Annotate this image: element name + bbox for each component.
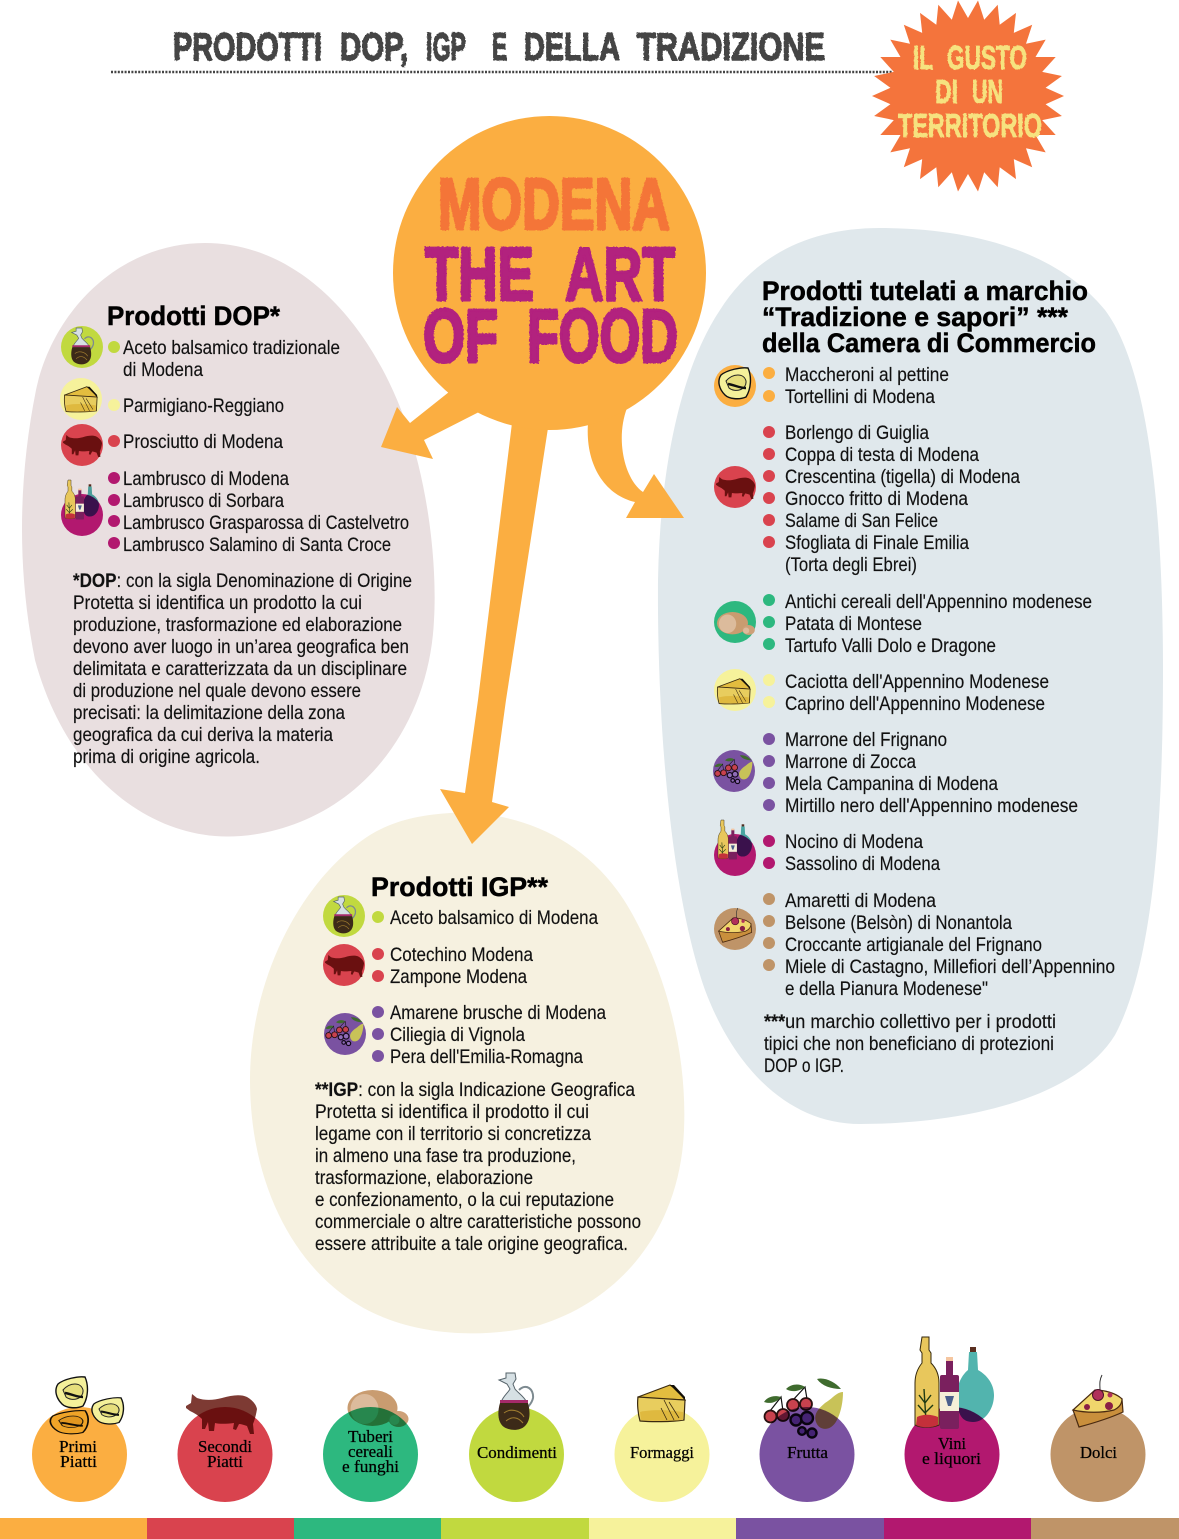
legend: tuberi cereali e funghi: Tuberi	[348, 1427, 393, 1446]
colour bar	[0, 1518, 1179, 1539]
panel: tradition background blob	[658, 228, 1163, 1124]
list: secondi piatti: Salame di San Felice	[785, 510, 938, 532]
list: tuberi cereali funghi	[763, 591, 1092, 657]
legend: primi piatti: Piatti	[60, 1452, 97, 1471]
icon: secondi piatti	[323, 944, 365, 986]
text block: tradition note: ***un marchio collettivo per i prodotti	[764, 1011, 1056, 1033]
title: TRADIZIONE	[637, 26, 825, 69]
title: E	[492, 26, 507, 69]
text block: DOP definition: geografica da cui deriva la materia	[73, 724, 333, 746]
text block: IGP definition: essere attribuite a tale origine geografica.	[315, 1233, 628, 1255]
list: DOP products: Lambrusco di Sorbara	[123, 490, 284, 512]
central circle with heading	[393, 116, 706, 430]
title: DOP,	[340, 26, 408, 69]
list: DOP products	[108, 337, 409, 556]
icon: secondi piatti	[714, 466, 756, 508]
central circle with heading: THE	[425, 232, 534, 316]
icon: vini e liquori	[714, 820, 756, 876]
badge: il gusto di un territorio: DI	[935, 73, 958, 110]
list: frutta	[763, 729, 1078, 817]
title: DELLA	[524, 26, 620, 69]
legend: formaggi: Formaggi	[630, 1443, 694, 1462]
text block: IGP definition: Protetta si identifica il prodotto il cui	[315, 1101, 589, 1123]
list: IGP products	[372, 907, 606, 1068]
text block: DOP definition: precisati: la delimitazione della zona	[73, 702, 345, 724]
list: secondi piatti	[763, 422, 1020, 576]
text block: DOP definition: Protetta si identifica un prodotto la cui	[73, 592, 362, 614]
panel: IGP background blob	[250, 813, 684, 1333]
text block: DOP definition: produzione, trasformazione ed elaborazione	[73, 614, 402, 636]
legend: dolci: Dolci	[1080, 1443, 1117, 1462]
text block: IGP definition: e confezionamento, o la cui reputazione	[315, 1189, 614, 1211]
heading: Prodotti DOP: Prodotti DOP*	[107, 301, 280, 331]
list: IGP products: Amarene brusche di Modena	[390, 1002, 606, 1024]
icon: frutta	[713, 750, 755, 792]
central circle with heading: ART	[565, 232, 675, 316]
list: formaggi: Caciotta dell'Appennino Modenese	[785, 671, 1049, 693]
list: DOP products: Prosciutto di Modena	[123, 431, 283, 453]
icon: vini e liquori	[61, 480, 103, 536]
list: IGP products: Zampone Modena	[390, 966, 527, 988]
text block: IGP definition	[315, 1079, 641, 1255]
list: frutta: Mela Campanina di Modena	[785, 773, 998, 795]
list: IGP products: Aceto balsamico di Modena	[390, 907, 598, 929]
legend: tuberi cereali e funghi: cereali	[348, 1442, 393, 1461]
text block: tradition note	[764, 1011, 1056, 1077]
list: frutta: Marrone del Frignano	[785, 729, 947, 751]
legend: tuberi cereali e funghi	[323, 1390, 418, 1502]
legend: formaggi	[614, 1385, 710, 1502]
arrow: to IGP	[440, 423, 548, 844]
panel: prodotti IGP	[315, 872, 641, 1255]
badge: il gusto di un territorio: TERRITORIO	[898, 107, 1042, 144]
legend: secondi piatti: Secondi	[198, 1437, 252, 1456]
icon: dolci	[714, 908, 756, 950]
list: secondi piatti: (Torta degli Ebrei)	[785, 554, 917, 576]
text block: IGP definition: in almeno una fase tra produzione,	[315, 1145, 576, 1167]
heading: tradition products	[762, 276, 1096, 358]
list: DOP products: Lambrusco Salamino di Santa Croce	[123, 534, 391, 556]
list: tuberi cereali funghi: Antichi cereali dell'Appennino modenese	[785, 591, 1092, 613]
legend: vini e liquori	[904, 1337, 1000, 1502]
list: vini e liquori	[763, 831, 940, 875]
list: secondi piatti: Borlengo di Guiglia	[785, 422, 929, 444]
list: dolci: Croccante artigianale del Frignano	[785, 934, 1042, 956]
central circle with heading: FOOD	[527, 294, 678, 378]
list: frutta: Mirtillo nero dell'Appennino modenese	[785, 795, 1078, 817]
legend: primi piatti	[32, 1377, 127, 1502]
panel: DOP background blob	[22, 243, 435, 836]
icon: secondi piatti	[61, 424, 103, 466]
text block: IGP definition: legame con il territorio si concretizza	[315, 1123, 591, 1145]
badge: il gusto di un territorio: UN	[972, 73, 1003, 110]
legend: vini e liquori: Vini	[938, 1434, 966, 1453]
list: formaggi	[763, 671, 1049, 715]
list: tuberi cereali funghi: Patata di Montese	[785, 613, 922, 635]
badge: il gusto di un territorio: GUSTO	[947, 39, 1027, 76]
legend: primi piatti: Primi	[59, 1437, 97, 1456]
list: DOP products: Lambrusco di Modena	[123, 468, 289, 490]
list: secondi piatti: Gnocco fritto di Modena	[785, 488, 968, 510]
heading: Prodotti IGP: Prodotti IGP**	[371, 872, 548, 902]
text block: DOP definition: devono aver luogo in un’area geografica ben	[73, 636, 409, 658]
text block: IGP definition: commerciale o altre caratteristiche possono	[315, 1211, 641, 1233]
title: PRODOTTI	[173, 26, 322, 69]
list: secondi piatti: Crescentina (tigella) di Modena	[785, 466, 1020, 488]
list: secondi piatti: Coppa di testa di Modena	[785, 444, 979, 466]
legend: dolci	[1050, 1375, 1146, 1502]
heading: tradition products: Prodotti tutelati a marchio	[762, 276, 1088, 306]
list: DOP products: Lambrusco Grasparossa di Castelvetro	[123, 512, 409, 534]
icon: frutta	[324, 1013, 366, 1055]
list: dolci: Amaretti di Modena	[785, 890, 936, 912]
list: IGP products: Pera dell'Emilia-Romagna	[390, 1046, 583, 1068]
arrow: to tradition products	[588, 408, 684, 518]
central circle with heading: MODENA	[438, 165, 670, 245]
list: IGP products: Ciliegia di Vignola	[390, 1024, 525, 1046]
legend: frutta	[760, 1379, 854, 1502]
list: dolci: Belsone (Belsòn) di Nonantola	[785, 912, 1012, 934]
icon: formaggi	[714, 669, 756, 711]
panel: prodotti DOP	[60, 301, 412, 768]
list: primi piatti: Maccheroni al pettine	[785, 364, 949, 386]
panel: prodotti tradizione e sapori	[713, 276, 1115, 1077]
text block: IGP definition: trasformazione, elaborazione	[315, 1167, 533, 1189]
list: vini e liquori: Nocino di Modena	[785, 831, 923, 853]
list: DOP products: Aceto balsamico tradizionale	[123, 337, 340, 359]
text block: IGP definition: **IGP: con la sigla Indicazione Geografica	[315, 1079, 635, 1101]
list: secondi piatti: Sfogliata di Finale Emilia	[785, 532, 969, 554]
icon: tuberi	[714, 601, 756, 643]
text block: tradition note: DOP o IGP.	[764, 1055, 844, 1077]
text block: DOP definition: delimitata e caratterizzata da un disciplinare	[73, 658, 407, 680]
heading: tradition products: della Camera di Commercio	[762, 328, 1096, 358]
list: formaggi: Caprino dell'Appennino Modenese	[785, 693, 1045, 715]
list: frutta: Marrone di Zocca	[785, 751, 916, 773]
legend: vini e liquori: e liquori	[922, 1449, 981, 1468]
legend: condimenti	[469, 1373, 564, 1502]
heading: tradition products: “Tradizione e sapori” ***	[762, 302, 1068, 332]
title: IGP	[426, 26, 466, 69]
list: dolci: Miele di Castagno, Millefiori dell’Appennino	[785, 956, 1115, 978]
central circle with heading: OF	[423, 294, 498, 378]
list: vini e liquori: Sassolino di Modena	[785, 853, 940, 875]
text block: tradition note: tipici che non beneficiano di protezioni	[764, 1033, 1054, 1055]
legend: tuberi cereali e funghi: e funghi	[342, 1457, 399, 1476]
title	[173, 26, 825, 69]
text block: DOP definition: di produzione nel quale devono essere	[73, 680, 361, 702]
icon: condimenti	[323, 895, 365, 937]
arrow: to DOP	[381, 392, 479, 459]
list: primi piatti: Tortellini di Modena	[785, 386, 935, 408]
badge: il gusto di un territorio: IL	[913, 39, 933, 76]
list: IGP products: Cotechino Modena	[390, 944, 533, 966]
list: DOP products: Parmigiano-Reggiano	[123, 395, 284, 417]
text block: DOP definition: prima di origine agricola.	[73, 746, 260, 768]
badge: il gusto di un territorio	[872, 0, 1064, 192]
text block: DOP definition: *DOP: con la sigla Denominazione di Origine	[73, 570, 412, 592]
list: tuberi cereali funghi: Tartufo Valli Dolo e Dragone	[785, 635, 996, 657]
icon: formaggi	[60, 378, 102, 420]
icon: primi piatti	[714, 365, 756, 407]
list: dolci	[763, 890, 1115, 1000]
text block: DOP definition	[73, 570, 412, 768]
legend: secondi piatti: Piatti	[207, 1452, 243, 1471]
legend: frutta: Frutta	[787, 1443, 828, 1462]
list: dolci: e della Pianura Modenese"	[785, 978, 988, 1000]
list: primi piatti	[763, 364, 949, 408]
list: DOP products: di Modena	[123, 359, 203, 381]
legend: condimenti: Condimenti	[477, 1443, 557, 1462]
icon: condimenti	[61, 326, 103, 368]
legend: secondi piatti	[178, 1394, 272, 1502]
